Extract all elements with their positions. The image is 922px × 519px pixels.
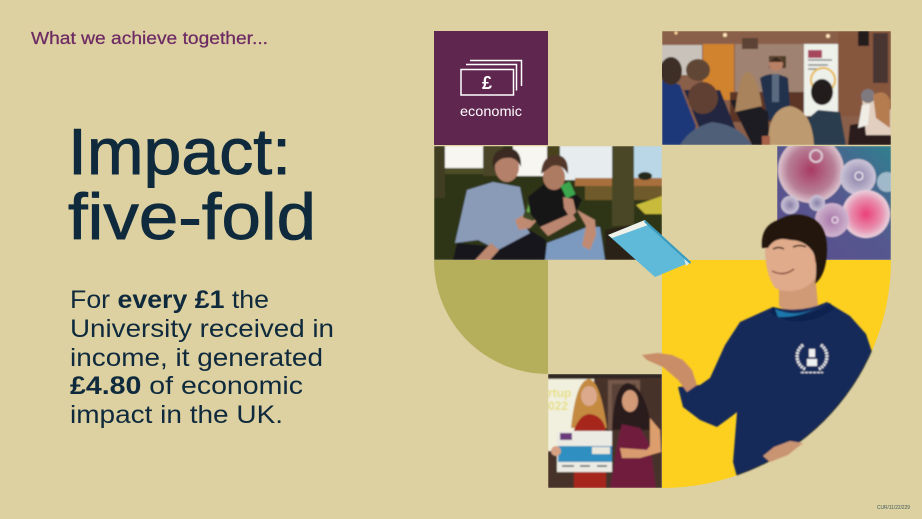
reference code: CUR/11/22/229 (877, 505, 910, 511)
neck (779, 272, 818, 314)
title: Impact: (68, 115, 291, 188)
body text: For every £1 the (70, 286, 269, 314)
photo: award winners with cheque: rtup (548, 386, 571, 400)
head (765, 228, 820, 291)
left woman (571, 379, 607, 428)
icon: stack of banknotes: £ (482, 73, 492, 93)
sweatshirt clipped by arc (677, 301, 873, 476)
left man (453, 230, 546, 260)
cheque (557, 431, 612, 472)
panel: economic: economic (460, 104, 522, 119)
body text (70, 286, 334, 429)
body text: University received in (70, 315, 334, 343)
right man (545, 227, 605, 260)
illustration: flying book (608, 220, 691, 277)
speaker (760, 74, 790, 120)
title: five-fold (68, 180, 316, 253)
photo: award winners with cheque (548, 374, 662, 488)
photo: cells under a microscope (777, 146, 891, 260)
olive quarter circle (434, 260, 548, 374)
title (68, 115, 316, 253)
photo: two founders outdoors (434, 146, 662, 260)
hand (642, 353, 697, 392)
right woman (612, 383, 652, 430)
lower hand (763, 441, 803, 462)
audience (662, 78, 696, 145)
eyebrow heading: What we achieve together... (31, 28, 268, 48)
photo: audience at a talk (660, 31, 891, 145)
right-hand tables (848, 123, 891, 145)
body text: income, it generated (70, 344, 323, 372)
yellow quarter circle (662, 260, 891, 488)
body text: £4.80 of economic (70, 372, 303, 400)
panel: economic (434, 31, 548, 145)
crest (797, 345, 827, 372)
body text: impact in the UK. (70, 401, 283, 429)
photo: award winners with cheque: 022 (548, 399, 568, 413)
student with outstretched hand (642, 214, 873, 476)
